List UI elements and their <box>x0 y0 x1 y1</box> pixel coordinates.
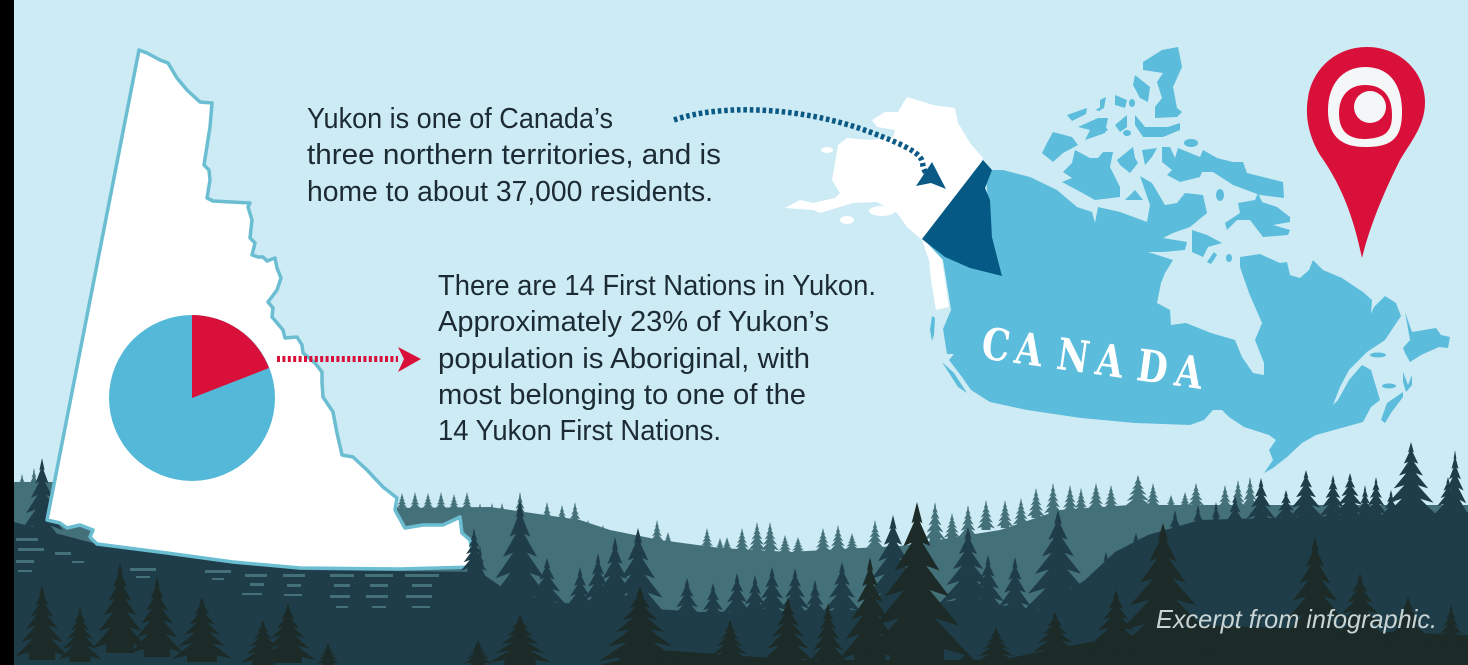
Alaska in white <box>785 97 983 310</box>
overlapping tree at Yukon tip <box>461 528 487 573</box>
Canada label: CANADA <box>978 319 1207 400</box>
text: First Nations fact: population is Aboriginal, with <box>438 343 810 375</box>
text: First Nations fact: Approximately 23% of Yukon’s <box>438 306 829 338</box>
map location pin icon <box>1307 47 1425 258</box>
text: Yukon territories fact: three northern territories, and is <box>307 139 721 171</box>
red dotted arrow from pie to text <box>277 347 421 372</box>
Yukon highlighted on Canada map <box>922 160 1002 276</box>
text: First Nations fact <box>438 270 876 447</box>
text: First Nations fact: There are 14 First Nations in Yukon. <box>438 270 876 302</box>
dotted blue arrow to Yukon <box>674 110 946 189</box>
Yukon territory map <box>47 50 475 569</box>
caption: Excerpt from infographic. <box>1156 604 1437 634</box>
text: First Nations fact: 14 Yukon First Nations. <box>438 415 721 447</box>
text: Yukon territories fact <box>307 103 721 208</box>
text: First Nations fact: most belonging to one of the <box>438 379 806 411</box>
middle forest layer <box>14 442 1468 665</box>
black strip at left edge <box>0 0 14 665</box>
distant forest layer <box>12 468 1468 665</box>
foreground forest layer <box>14 502 1468 665</box>
Canada map <box>922 47 1450 473</box>
text: Yukon territories fact: Yukon is one of Canada’s <box>307 103 613 135</box>
pie chart: Aboriginal population share <box>109 315 275 481</box>
text: Yukon territories fact: home to about 37,000 residents. <box>307 176 713 208</box>
light streaks among trees <box>16 538 439 608</box>
